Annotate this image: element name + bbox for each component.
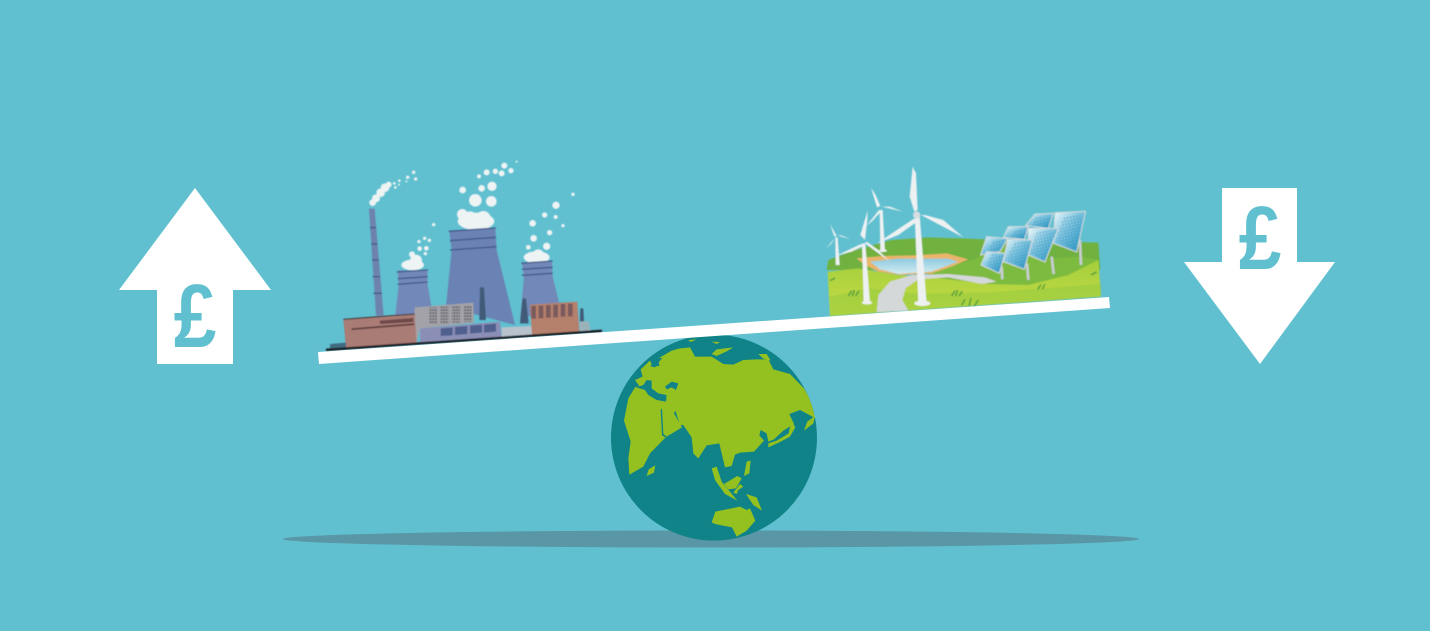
land: Madagascar (647, 465, 655, 476)
icon: down arrow with pound sign: £ (1239, 187, 1281, 288)
land: Southeast Asia islands (712, 467, 737, 501)
land: Japan (768, 424, 796, 448)
globe (611, 335, 817, 541)
third turbine (880, 210, 885, 251)
brown left building (343, 314, 417, 349)
icon: down arrow with pound sign (1184, 187, 1335, 364)
brown right building (530, 302, 579, 335)
mid hill (928, 247, 1100, 293)
large turbine (915, 215, 927, 303)
large cooling tower (446, 229, 515, 325)
grey low building (420, 322, 502, 344)
grey mid building (415, 303, 474, 343)
ground line (326, 330, 602, 351)
icon: up arrow with pound sign: £ (174, 265, 216, 366)
pipes and small stacks (479, 287, 584, 323)
second turbine (862, 243, 870, 303)
right cooling tower (520, 261, 559, 320)
land: arctic islands (712, 347, 733, 356)
smoke clouds (369, 161, 575, 270)
seas: Mediterranean, Black Sea, Baltic (636, 358, 678, 402)
icon: up arrow with pound sign (119, 188, 271, 366)
renewable landscape (826, 167, 1101, 316)
fourth turbine (835, 237, 840, 265)
small cooling tower (395, 270, 433, 315)
road (877, 274, 997, 312)
lake (857, 253, 968, 275)
grass tufts (830, 272, 1097, 306)
tower bands (370, 228, 553, 293)
land: Australia (712, 507, 755, 537)
land: Eurasia and Africa (624, 347, 817, 475)
front hills (828, 260, 1101, 316)
back hills (827, 237, 1100, 270)
wind turbines (826, 167, 963, 306)
ground shadow (283, 530, 1139, 548)
factory (326, 161, 602, 351)
chimney (369, 209, 384, 316)
balance beam (318, 297, 1110, 364)
solar panels (981, 211, 1086, 280)
